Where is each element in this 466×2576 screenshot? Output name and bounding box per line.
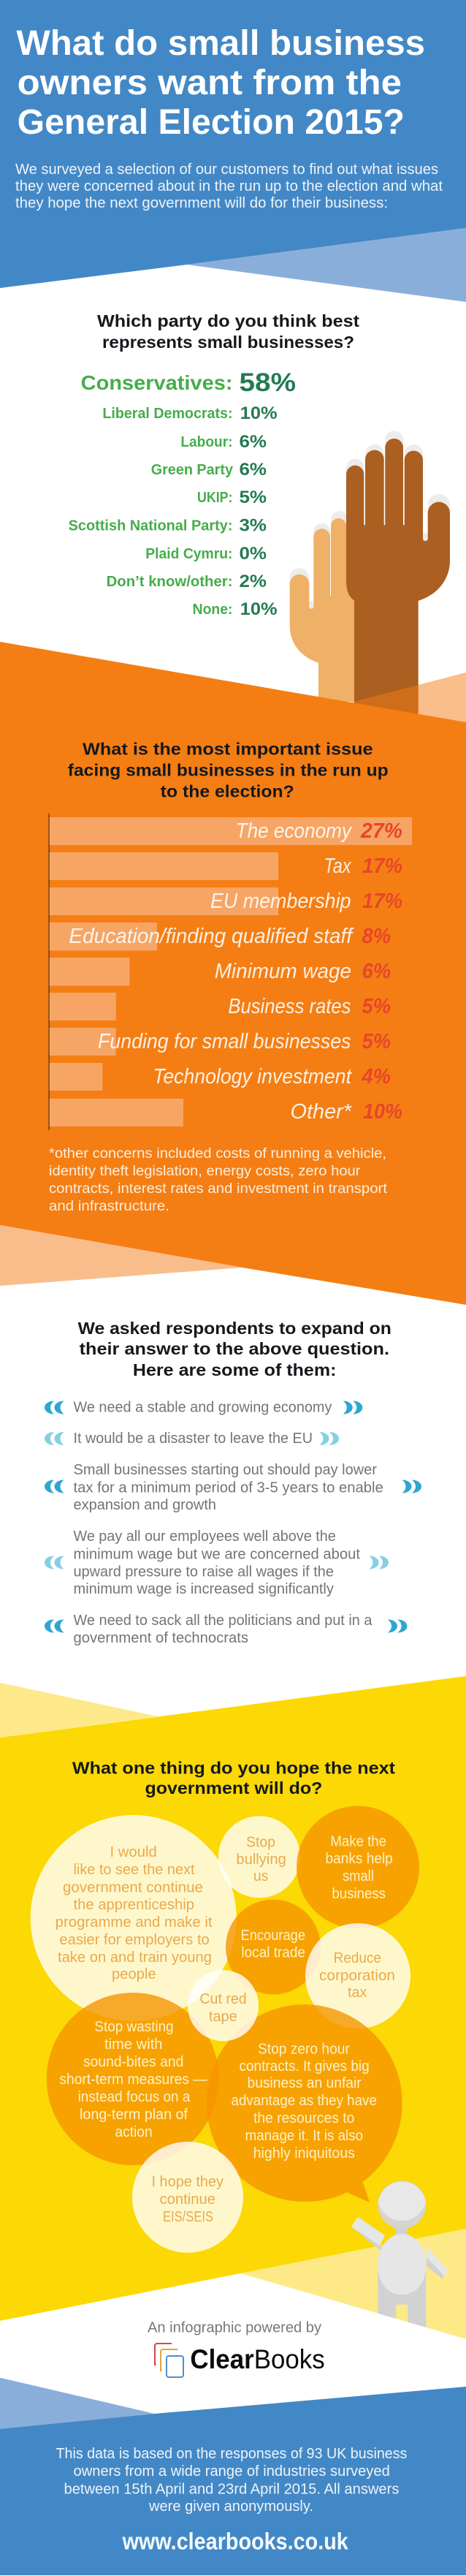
bubble: apprenticeship: government continue [63,1879,203,1895]
bubble: banks: banks help [326,1851,393,1867]
bubble: stop bullying [218,1816,300,1898]
icon: person speaking [351,2181,448,2339]
footnote [49,1145,388,1214]
logo: ClearBooks [155,2344,325,2377]
data note: were given anonymously. [148,2499,313,2515]
intro text [15,162,443,211]
bar chart: Technology investment [153,1065,352,1088]
bar chart: Tax [324,855,352,878]
bubble: stop wasting time: time with [104,2037,162,2053]
quote 3: Small businesses starting out should pay lower [73,1462,377,1478]
footnote: and infrastructure. [49,1198,169,1214]
bar chart: 27% [360,819,402,843]
bar chart: Business rates [228,995,351,1018]
data note [56,2446,407,2515]
quote 4: minimum wage but we are concerned about [73,1547,360,1563]
party results list: 10% [240,404,278,423]
bar chart: 5% [362,1030,391,1053]
heading: issue question [68,740,389,801]
panel: footer [0,2378,466,2575]
website url: www.clearbooks.co.uk [122,2528,348,2555]
heading: hopes question: What one thing do you hope the next [72,1759,395,1778]
panel: respondent quotes [45,1319,421,1646]
bar chart: 6% [362,960,391,983]
title: General Election 2015? [18,103,405,142]
powered by text: An infographic powered by [148,2320,321,2336]
party results list: Don’t know/other: [107,573,232,590]
title: What do small business [16,24,425,63]
party results list: 58% [240,368,296,397]
bar chart: Other* [291,1100,352,1124]
quote 3: expansion and growth [73,1497,216,1513]
orange accent bottom [0,1225,242,1286]
heading: quotes: Here are some of them: [133,1360,336,1379]
party results list: 5% [240,488,267,507]
heading: issue question: to the election? [161,782,294,801]
quote 5: government of technocrats [73,1630,248,1646]
bubble: stop wasting time: short-term measures — [59,2072,207,2088]
quote 5: We need to sack all the politicians and put in a [73,1613,373,1629]
heading: quotes: We asked respondents to expand on [78,1319,391,1338]
party results list: 6% [240,432,267,452]
intro text: they were concerned about in the run up to the election and what [15,178,443,194]
party results list: Scottish National Party: [69,518,232,534]
icon: raised hands [290,431,450,720]
footnote: contracts, interest rates and investment in transport [49,1181,388,1197]
bubble: stop wasting time [47,1993,219,2165]
bubble: EIS/SEIS: EIS/SEIS [163,2209,213,2225]
header background [0,0,466,288]
bar chart: Funding for small businesses [98,1030,351,1053]
party results list [69,368,296,619]
intro text: We surveyed a selection of our customers to find out what issues [15,162,438,178]
party results list: 6% [240,460,267,480]
heading: quotes: their answer to the above question. [80,1339,389,1358]
bar chart: The economy [236,819,353,843]
bar chart: 17% [362,855,402,878]
panel: important issue [0,642,466,1305]
heading: party question [97,311,359,352]
bar chart: EU membership [210,890,351,913]
yellow accent bottom [241,2229,466,2339]
bubble: zero hour contracts with speech tail [207,2004,402,2202]
footer accent [0,2378,155,2429]
bar chart: 5% [362,995,391,1018]
bubble: zero hour contracts with speech tail: advantage as they have [231,2093,377,2109]
data note: owners from a wide range of industries surveyed [73,2463,390,2480]
yellow accent top [0,1683,158,1738]
bar chart: Education/finding qualified staff [69,925,354,948]
bar chart: 17% [362,890,402,913]
bar chart: 10% [363,1100,402,1124]
dark hand [346,431,450,720]
party results list: Conservatives: [81,371,232,394]
heading: issue question: facing small businesses in the run up [68,761,389,780]
quote 4: We pay all our employees well above the [73,1528,336,1545]
bubble: zero hour contracts with speech tail: the resources to [253,2110,354,2126]
bubble: apprenticeship: take on and train young [58,1950,212,1966]
bubble: stop wasting time: Stop wasting [94,2019,174,2035]
bubble: encourage local trade: local trade [241,1945,305,1961]
bubble: stop wasting time: long-term plan of [80,2107,188,2123]
white band [0,2273,466,2485]
heading: hopes question: government will do? [145,1778,322,1797]
yellow background [0,1676,466,2321]
orange accent top [351,673,466,722]
orange background [0,642,466,1305]
bubble: cut red tape: tape [209,2009,237,2025]
bubble: zero hour contracts with speech tail: manage it. It is also [245,2128,363,2144]
bubble: encourage local trade [226,1899,321,1994]
panel: next government hopes [0,1676,466,2339]
bubble: zero hour contracts with speech tail: Stop zero hour [258,2041,350,2057]
bubble: EIS/SEIS: I hope they [152,2174,224,2190]
bubble: cut red tape: Cut red [199,1991,247,2007]
quote 3 [45,1462,421,1513]
title: owners want from the [18,64,402,102]
quote 1: We need a stable and growing economy [73,1400,332,1416]
bubble: stop bullying: Stop [246,1835,275,1851]
title [16,24,425,142]
data note: This data is based on the responses of 93 UK business [56,2446,407,2462]
bubble: stop wasting time: action [115,2124,153,2140]
logo: ClearBooks: ClearBooks [190,2344,325,2374]
panel: party poll [69,311,450,720]
quote 2: It would be a disaster to leave the EU [73,1431,313,1447]
bubble: corporation tax [305,1923,410,2028]
bubble: EIS/SEIS: continue [159,2192,215,2208]
quote 4: upward pressure to raise all wages if the [73,1564,334,1580]
bar chart: 4% [362,1065,391,1088]
bubble: corporation tax: tax [348,1985,367,2001]
bubble: banks: business [332,1886,386,1902]
bubble: zero hour contracts with speech tail: highly iniquitous [253,2145,355,2162]
bubble: stop bullying: us [253,1868,268,1884]
quote 4: minimum wage is increased significantly [73,1581,334,1597]
bubble: apprenticeship: like to see the next [73,1862,195,1878]
party results list: 3% [240,516,267,536]
quote 4 [45,1528,389,1597]
bar chart: 8% [362,925,391,948]
party results list: Green Party [151,461,234,478]
bubble: cut red tape [188,1970,259,2041]
heading: quotes [78,1319,391,1379]
bubble: banks: Make the [330,1834,386,1850]
bubble: corporation tax: Reduce [333,1950,381,1966]
party results list: 2% [240,572,267,591]
heading: issue question: What is the most important issue [83,740,373,759]
bubble: corporation tax: corporation [319,1968,395,1984]
bubble: banks [297,1806,419,1928]
quote 3: tax for a minimum period of 3-5 years to enable [73,1480,383,1496]
bubble: apprenticeship: the apprenticeship [73,1897,194,1913]
light hand [290,511,365,702]
bubble: apprenticeship [31,1815,237,2021]
bubble: stop bullying: bullying [236,1852,286,1868]
party results list: None: [193,601,232,618]
data note: between 15th April and 23rd April 2015. All answers [64,2482,399,2498]
bubble: zero hour contracts with speech tail: contracts. It gives big [240,2058,370,2075]
panel: footer logo area [0,2273,466,2485]
footer background [0,2387,466,2575]
bubble: banks: small [343,1868,374,1884]
party results list: Labour: [180,433,232,450]
bubble: apprenticeship: people [112,1966,156,1982]
footnote: identity theft legislation, energy costs, zero hour [49,1163,361,1179]
bubble: stop wasting time: instead focus on a [78,2089,191,2105]
bar chart: Minimum wage [215,960,351,983]
party results list: 10% [240,599,278,619]
bar chart [49,814,412,1130]
party results list: Liberal Democrats: [102,405,232,422]
bubble: apprenticeship: easier for employers to [59,1932,210,1948]
bubble: apprenticeship: programme and make it [56,1914,213,1931]
bubble: EIS/SEIS [132,2142,243,2253]
party results list: 0% [240,544,267,564]
bubble: stop wasting time: sound-bites and [83,2054,183,2070]
heading: party question: represents small businesses? [102,333,354,352]
header accent triangle [187,228,466,302]
heading: party question: Which party do you think best [97,311,359,330]
quote 5 [45,1613,408,1646]
panel: header [0,0,466,302]
intro text: they hope the next government will do for their business: [15,195,388,211]
bubble: zero hour contracts with speech tail: business an unfair [247,2075,362,2091]
party results list: Plaid Cymru: [145,545,232,562]
heading: hopes question [72,1759,395,1797]
bubble: encourage local trade: Encourage [241,1928,305,1944]
footnote: *other concerns included costs of running a vehicle, [49,1145,386,1162]
bubble: apprenticeship: I would [110,1844,157,1860]
party results list: UKIP: [197,489,232,506]
